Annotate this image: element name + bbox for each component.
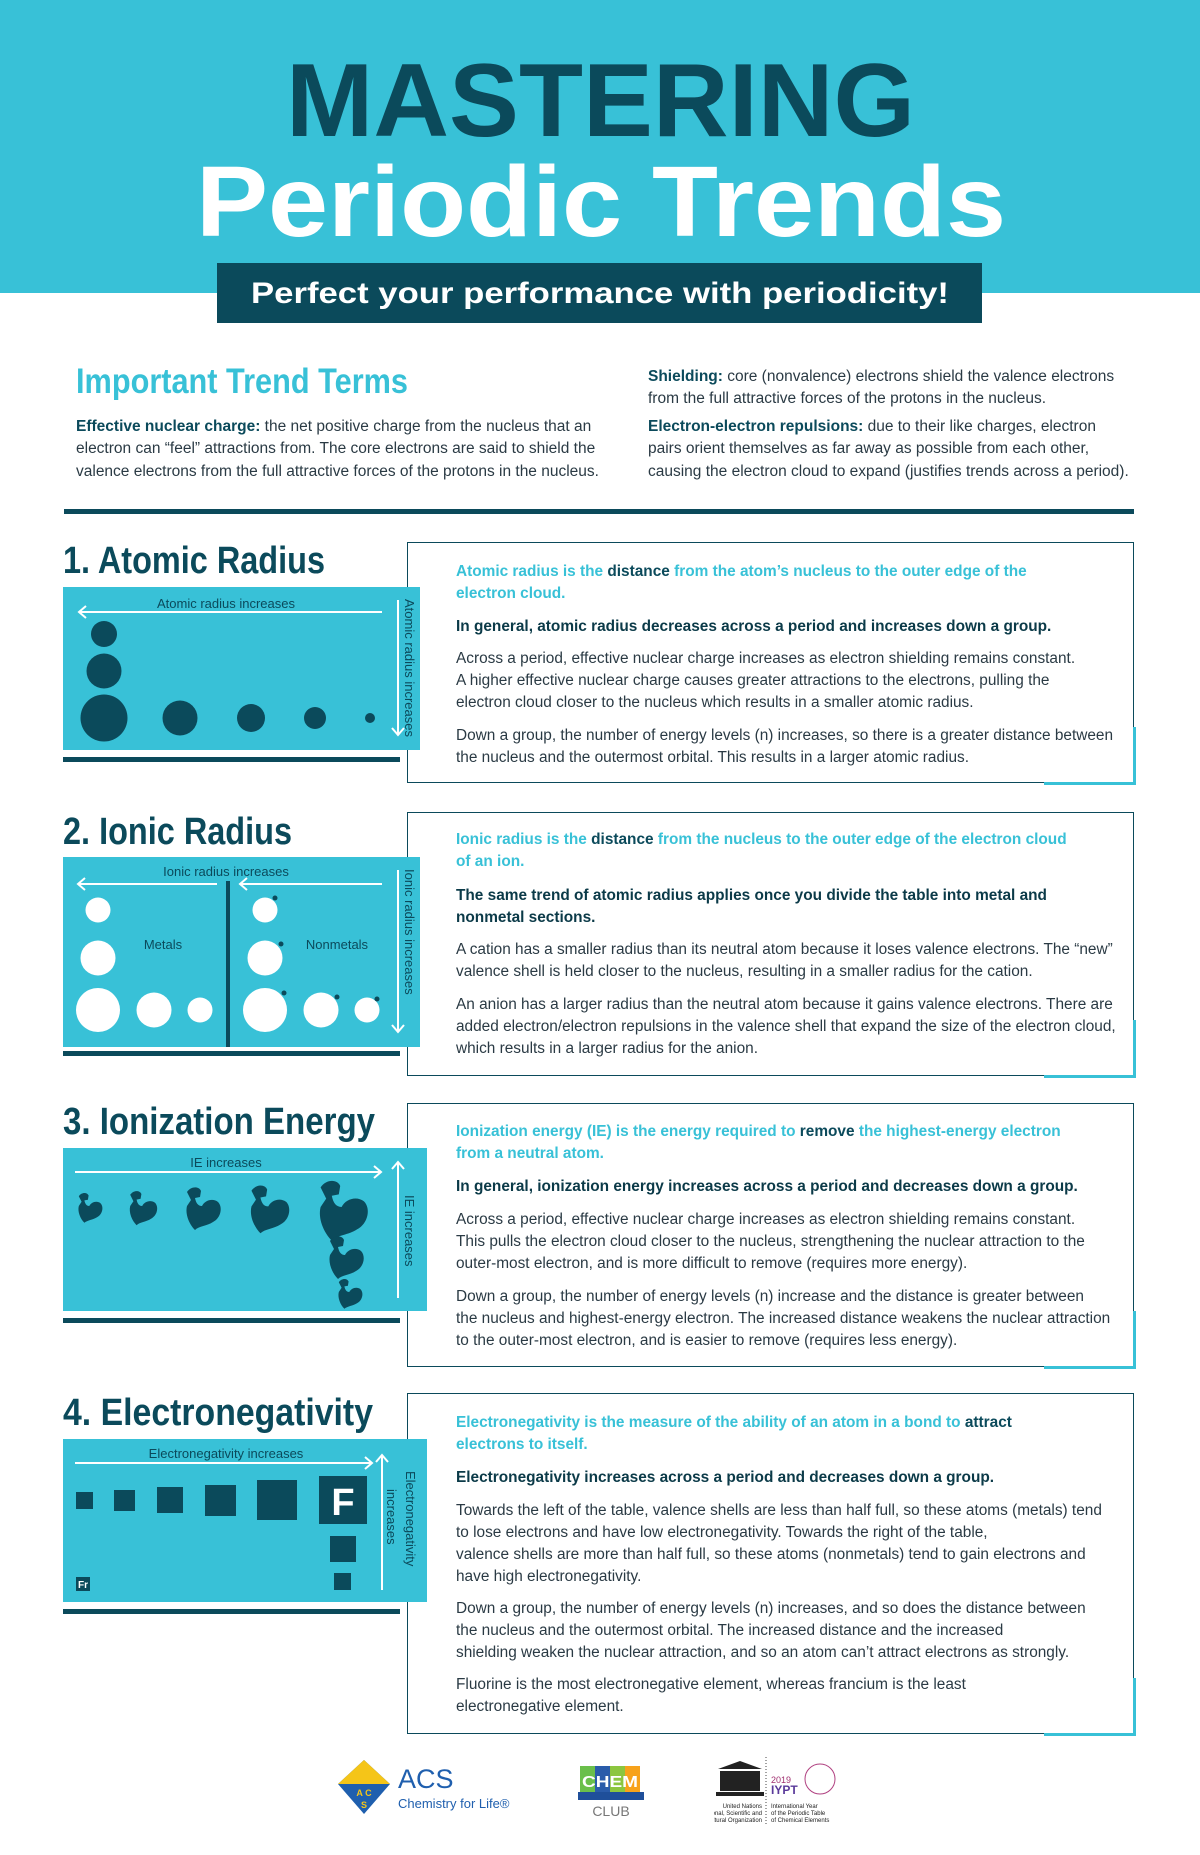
- logo: ACS: A C: [356, 1788, 372, 1798]
- header: [0, 0, 1200, 323]
- text box 4: to lose electrons and have low electronegativity. Towards the right of the table,: [456, 1524, 988, 1541]
- panel: electronegativity diagram: increases: [384, 1489, 399, 1545]
- term: electron-electron repulsions: pairs orient themselves as far away as possible from each other,: [648, 440, 1089, 457]
- text box 2: An anion has a larger radius than the neutral atom because it gains valence electrons. There are: [456, 996, 1113, 1013]
- panel: electronegativity diagram: Electronegativity increases: [149, 1446, 304, 1461]
- text box 1: [407, 542, 1134, 783]
- logo: ACS: S: [361, 1800, 367, 1810]
- text box 1: Down a group, the number of energy levels (n) increases, so there is a greater distance between: [456, 727, 1113, 744]
- panel: ionization energy diagram: IE increases: [402, 1195, 417, 1267]
- logo: UNESCO / IYPT: International Year: [771, 1804, 818, 1810]
- logo: UNESCO / IYPT: United Nations: [723, 1804, 762, 1810]
- term: shielding: [648, 368, 1114, 407]
- logo: UNESCO / IYPT: of Chemical Elements: [771, 1818, 829, 1824]
- panel: ionization energy diagram: [63, 1148, 427, 1311]
- term: effective nuclear charge: electron can “feel” attractions from. The core electrons are said to shield the: [76, 440, 595, 457]
- text box 2: valence shell is held closer to the nucleus, resulting in a smaller radius for the cation.: [456, 963, 1033, 980]
- text box 3: Ionization energy (IE) is the energy required to remove the highest-energy electron: [456, 1123, 1061, 1140]
- term: shielding: from the full attractive forces of the protons in the nucleus.: [648, 390, 1046, 407]
- title: Periodic Trends: Periodic Trends: [196, 146, 1006, 258]
- logo: ACS: ACS: [398, 1764, 454, 1794]
- text box 1: Atomic radius is the distance from the atom’s nucleus to the outer edge of the: [456, 563, 1027, 580]
- text box 1: Across a period, effective nuclear charge increases as electron shielding remains constant.: [456, 650, 1075, 667]
- text box 3: This pulls the electron cloud closer to the nucleus, strengthening the nuclear attraction to the: [456, 1233, 1085, 1250]
- icons: flexed arms: [78, 1181, 368, 1309]
- term: electron-electron repulsions: causing the electron cloud to expand (justifies trends across a period).: [648, 463, 1129, 480]
- panel: atomic radius diagram: Atomic radius increases: [157, 596, 295, 611]
- text box 2: nonmetal sections.: [456, 909, 595, 926]
- term: effective nuclear charge: Effective nuclear charge: the net positive charge from the nucleus that an: [76, 418, 591, 435]
- text box 3: Down a group, the number of energy levels (n) increase and the distance is greater between: [456, 1288, 1084, 1305]
- text box 3: from a neutral atom.: [456, 1145, 604, 1162]
- panel: electronegativity diagram: [63, 1439, 427, 1602]
- panel: atomic radius diagram: [63, 587, 420, 750]
- panel: ionic radius diagram: [63, 857, 420, 1047]
- text box 1: electron cloud.: [456, 585, 565, 602]
- text box 3: the nucleus and highest-energy electron. The increased distance weakens the nuclear attraction: [456, 1310, 1110, 1327]
- panel: electronegativity diagram: Electronegativity: [403, 1471, 418, 1567]
- header band: [0, 0, 1200, 293]
- text box 4: electronegative element.: [456, 1698, 624, 1715]
- logo: ACS: Chemistry for Life®: [398, 1796, 510, 1811]
- text box 4: [407, 1393, 1134, 1734]
- subtitle banner: Perfect your performance with periodicity!: [251, 277, 949, 310]
- text box 4: Electronegativity is the measure of the ability of an atom in a bond to attract: [456, 1414, 1012, 1431]
- text box 1: A higher effective nuclear charge causes greater attractions to the electrons, pulling the: [456, 672, 1049, 689]
- text box 4: shielding weaken the nuclear attraction, and so an atom can’t attract electrons as strongly.: [456, 1644, 1069, 1661]
- text box 2: Ionic radius is the distance from the nucleus to the outer edge of the electron cloud: [456, 831, 1067, 848]
- logo: UNESCO / IYPT: 2019: [771, 1775, 791, 1785]
- term: effective nuclear charge: [76, 418, 599, 480]
- term: electron-electron repulsions: Electron-electron repulsions: due to their like charges, electron: [648, 418, 1096, 435]
- text box 2: added electron/electron repulsions in the valence shell that expand the size of the electron cloud,: [456, 1018, 1116, 1035]
- logo: UNESCO / IYPT: IYPT: [771, 1783, 798, 1797]
- text box 2: of an ion.: [456, 853, 524, 870]
- panel: ionic radius diagram: Metals: [144, 937, 183, 952]
- text box 3: to the outer-most electron, and is easier to remove (requires less energy).: [456, 1332, 957, 1349]
- term: electron-electron repulsions: [648, 418, 1129, 480]
- panel: ionization energy diagram: IE increases: [190, 1155, 262, 1170]
- text box 1: the nucleus and the outermost orbital. This results in a larger atomic radius.: [456, 749, 969, 766]
- text box 4: Fluorine is the most electronegative element, whereas francium is the least: [456, 1676, 966, 1693]
- panel: atomic radius diagram: Atomic radius increases: [402, 599, 417, 737]
- logo: UNESCO / IYPT: [714, 1757, 836, 1824]
- text box 4: Towards the left of the table, valence shells are less than half full, so these atoms (metals) tend: [456, 1502, 1102, 1519]
- logo: UNESCO / IYPT: of the Periodic Table: [771, 1811, 826, 1817]
- logo: ChemClub: CHEM: [582, 1774, 638, 1791]
- text box 2: A cation has a smaller radius than its neutral atom because it loses valence electrons. The “new”: [456, 941, 1113, 958]
- text box 4: have high electronegativity.: [456, 1568, 641, 1585]
- text box 3: Across a period, effective nuclear charge increases as electron shielding remains constant.: [456, 1211, 1075, 1228]
- text box 4: Down a group, the number of energy levels (n) increases, and so does the distance between: [456, 1600, 1086, 1617]
- text box 3: outer-most electron, and is more difficult to remove (requires more energy).: [456, 1255, 967, 1272]
- logo: ChemClub: [578, 1766, 644, 1819]
- text box 4: the nucleus and the outermost orbital. The increased distance and the increased: [456, 1622, 1003, 1639]
- text box 4: Electronegativity increases across a period and decreases down a group.: [456, 1469, 994, 1486]
- panel: electronegativity diagram: Fr: [78, 1580, 88, 1591]
- logo: ChemClub: CLUB: [592, 1803, 630, 1819]
- subtitle banner: [217, 263, 982, 323]
- text box 3: [407, 1103, 1134, 1367]
- text box 2: which results in a larger radius for the anion.: [456, 1040, 758, 1057]
- term: effective nuclear charge: valence electrons from the full attractive forces of the protons in the nucleus.: [76, 463, 599, 480]
- panel: ionic radius diagram: Ionic radius increases: [402, 869, 417, 995]
- text box 4: valence shells are more than half full, so these atoms (nonmetals) tend to gain electrons and: [456, 1546, 1086, 1563]
- text box 3: In general, ionization energy increases across a period and decreases down a group.: [456, 1178, 1078, 1195]
- panel: ionic radius diagram: Ionic radius increases: [163, 864, 289, 879]
- term: shielding: Shielding: core (nonvalence) electrons shield the valence electrons: [648, 368, 1114, 385]
- text box 4: electrons to itself.: [456, 1436, 588, 1453]
- panel: ionic radius diagram: Nonmetals: [306, 937, 369, 952]
- logo: ACS: [338, 1760, 510, 1814]
- text box 2: [407, 812, 1134, 1076]
- text box 1: In general, atomic radius decreases across a period and increases down a group.: [456, 618, 1051, 635]
- panel: electronegativity diagram: F: [331, 1482, 355, 1524]
- title: MASTERING: MASTERING: [286, 43, 915, 159]
- text box 2: The same trend of atomic radius applies once you divide the table into metal and: [456, 887, 1047, 904]
- text box 1: electron cloud closer to the nucleus which results in a smaller atomic radius.: [456, 694, 974, 711]
